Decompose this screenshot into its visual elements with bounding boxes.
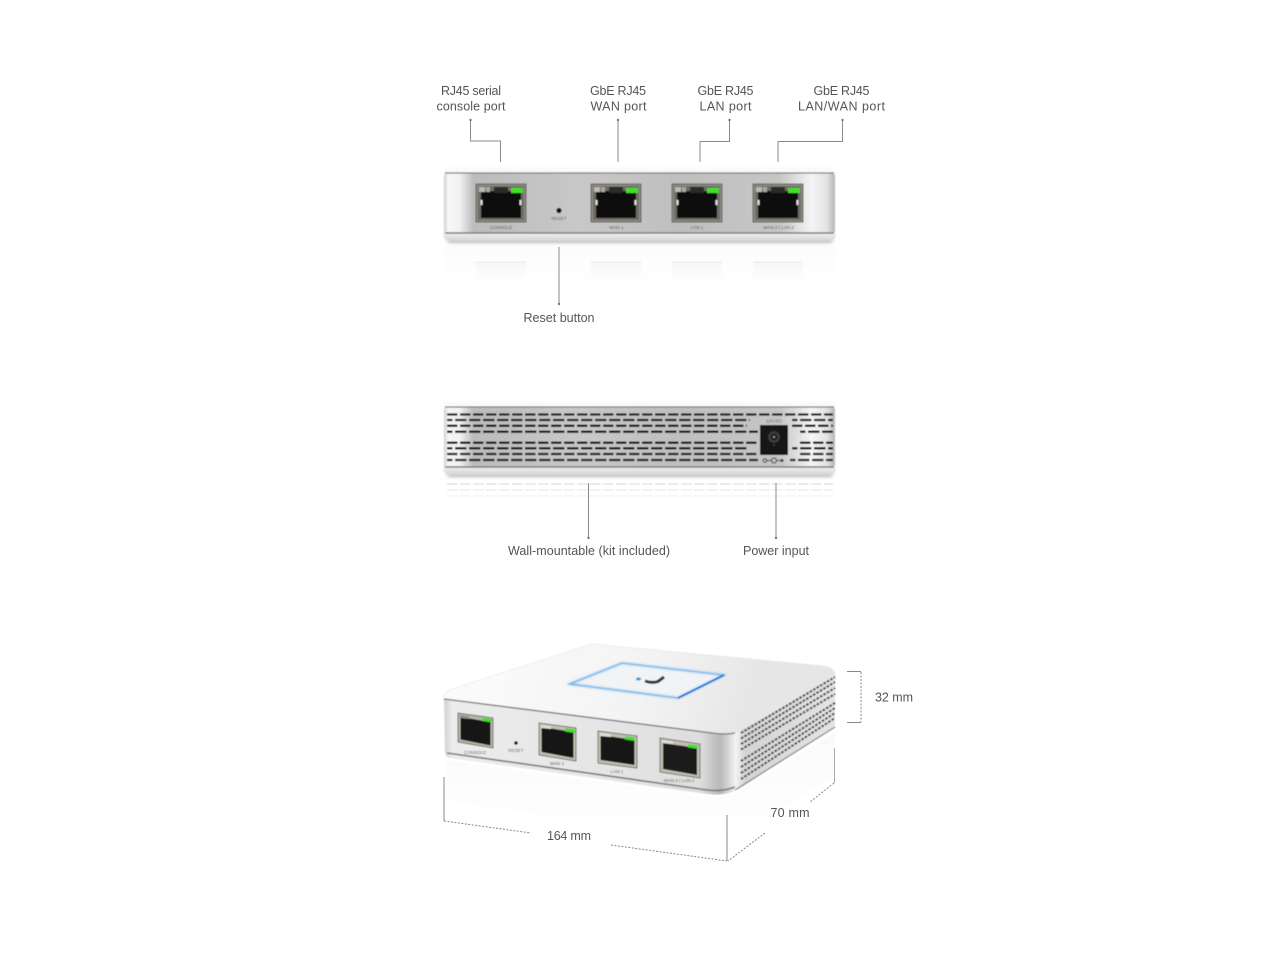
device: isometric view: WAN 2 / LAN 2 (664, 778, 695, 783)
logo (645, 677, 664, 682)
callout: power input (743, 483, 810, 558)
dimension: width 164 mm: 164 mm (547, 829, 591, 843)
power jack (760, 418, 788, 463)
callout: power input: Power input (743, 544, 810, 558)
callout: RJ45 serial console port: RJ45 serial (441, 84, 501, 98)
callout: GbE RJ45 LAN port: LAN port (700, 100, 752, 114)
device: front view: CONSOLE (490, 225, 512, 230)
console port (458, 713, 493, 748)
reflection: front view (444, 246, 835, 290)
callout: GbE RJ45 LAN port: GbE RJ45 (698, 84, 754, 98)
dimension: depth 70 mm (728, 748, 834, 861)
callout: RJ45 serial console port: console port (436, 100, 506, 114)
callout: GbE RJ45 WAN port (590, 84, 647, 162)
blue square light (570, 663, 724, 698)
callout: GbE RJ45 WAN port: WAN port (590, 100, 647, 114)
ventilation slots (447, 414, 833, 460)
dimension: depth 70 mm: 70 mm (770, 806, 810, 820)
power jack: 12V DC (766, 418, 783, 424)
dimension: height 32 mm (847, 672, 913, 722)
dimension: width 164 mm (444, 777, 727, 861)
device: front view (443, 167, 836, 242)
callout: reset button: Reset button (524, 311, 595, 325)
right face (735, 677, 835, 791)
top face (444, 644, 835, 734)
reflection (446, 732, 835, 845)
device: isometric view: RESET (508, 748, 524, 753)
device: front view: RESET (551, 216, 567, 221)
callout: GbE RJ45 LAN/WAN port (778, 84, 886, 162)
callout: GbE RJ45 LAN/WAN port: LAN/WAN port (798, 100, 886, 114)
front face (444, 699, 735, 795)
callout: reset button (524, 247, 595, 325)
LAN port (598, 731, 637, 768)
device: front view: WAN 2 / LAN 2 (763, 225, 794, 230)
device: back view (443, 401, 836, 476)
callout: GbE RJ45 WAN port: GbE RJ45 (590, 84, 646, 98)
WAN 2 port (660, 738, 700, 778)
callout: wall-mountable: Wall-mountable (kit included) (508, 544, 670, 558)
device: isometric view (444, 644, 835, 845)
device: isometric view: LAN 1 (611, 769, 624, 774)
device: isometric view: WAN 1 (550, 761, 565, 766)
reflection: back view (447, 484, 833, 496)
device: front view: WAN 1 (609, 225, 624, 230)
device: front view: LAN 1 (691, 225, 704, 230)
WAN port (539, 723, 576, 761)
callout: GbE RJ45 LAN/WAN port: GbE RJ45 (814, 84, 870, 98)
device: isometric view: CONSOLE (464, 750, 486, 755)
callout: GbE RJ45 LAN port (698, 84, 754, 162)
callout: RJ45 serial console port (436, 84, 506, 162)
dimension: height 32 mm: 32 mm (875, 690, 913, 704)
